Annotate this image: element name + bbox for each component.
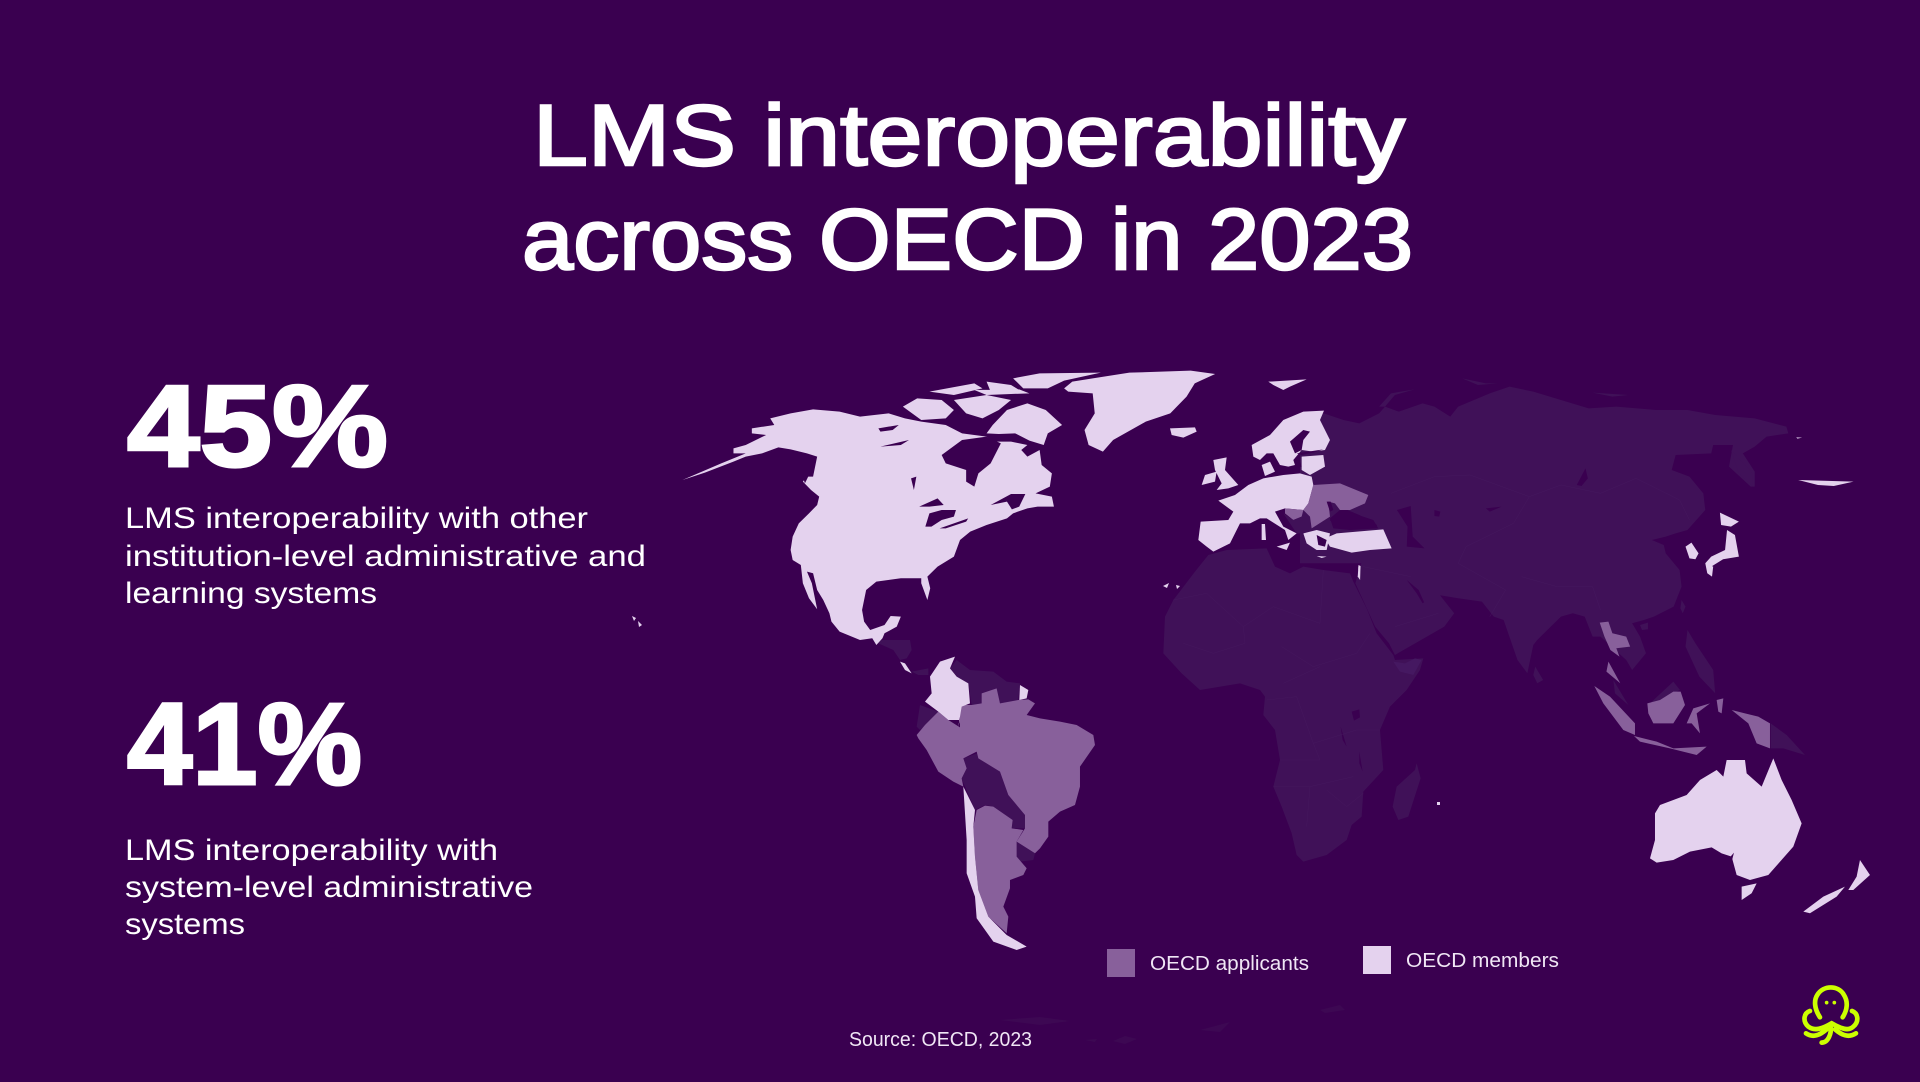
Greenland	[1064, 371, 1215, 452]
map: Asia and Middle East (non-members)	[1300, 378, 1788, 693]
map: South America members	[900, 657, 1028, 950]
legend: OECD applicants: OECD applicants	[1150, 953, 1309, 975]
Arctic islands	[903, 373, 1101, 445]
45% description	[125, 502, 646, 610]
41% description: LMS interoperability with	[125, 834, 498, 867]
45% description: learning systems	[125, 577, 377, 610]
Israel	[1358, 565, 1360, 580]
map: North America and Greenland members	[682, 371, 1215, 645]
41% figure: 41%	[127, 679, 362, 809]
faint borders	[1363, 475, 1689, 627]
map: Africa (non-members)	[1163, 548, 1423, 862]
45% description: institution-level administrative and	[125, 540, 646, 573]
map: Europe members	[1170, 379, 1392, 570]
map: Thailand and Malaysia applicant	[1600, 622, 1630, 683]
41% description: systems	[125, 908, 245, 941]
map: Indonesia and Oceania	[1594, 680, 1870, 913]
legend: OECD applicants	[1107, 949, 1309, 977]
Baltic and Aegean	[1290, 430, 1327, 547]
Australia and New Zealand	[1650, 758, 1802, 880]
legend: OECD members	[1363, 946, 1559, 974]
map: South America applicants	[917, 688, 1095, 933]
Lake Victoria	[1341, 709, 1363, 772]
map: Japan and Korea members	[1358, 437, 1854, 580]
map: small islands and Antarctic fragments	[632, 583, 1440, 1044]
title: LMS interoperability	[533, 88, 1405, 184]
Indonesia applicant	[1594, 686, 1770, 755]
41% description	[125, 834, 533, 941]
icon: octopus logo	[1804, 987, 1857, 1043]
45% figure: 45%	[127, 361, 388, 491]
stat: 45%	[125, 361, 646, 610]
world map	[632, 371, 1870, 1044]
stat: 41%	[125, 679, 533, 941]
title	[522, 88, 1413, 288]
title: across OECD in 2023	[522, 192, 1413, 288]
source note: Source: OECD, 2023	[849, 1029, 1032, 1051]
45% description: LMS interoperability with other	[125, 502, 588, 535]
Europe applicants	[1285, 483, 1368, 528]
Hudson Bay and lakes	[803, 425, 1025, 528]
Somalia	[1393, 658, 1422, 675]
legend: OECD members: OECD members	[1406, 950, 1559, 972]
map: Central America and northern South America (non-members)	[877, 640, 1035, 862]
inland seas	[1330, 468, 1588, 548]
41% description: system-level administrative	[125, 871, 533, 904]
legend	[1107, 946, 1559, 977]
